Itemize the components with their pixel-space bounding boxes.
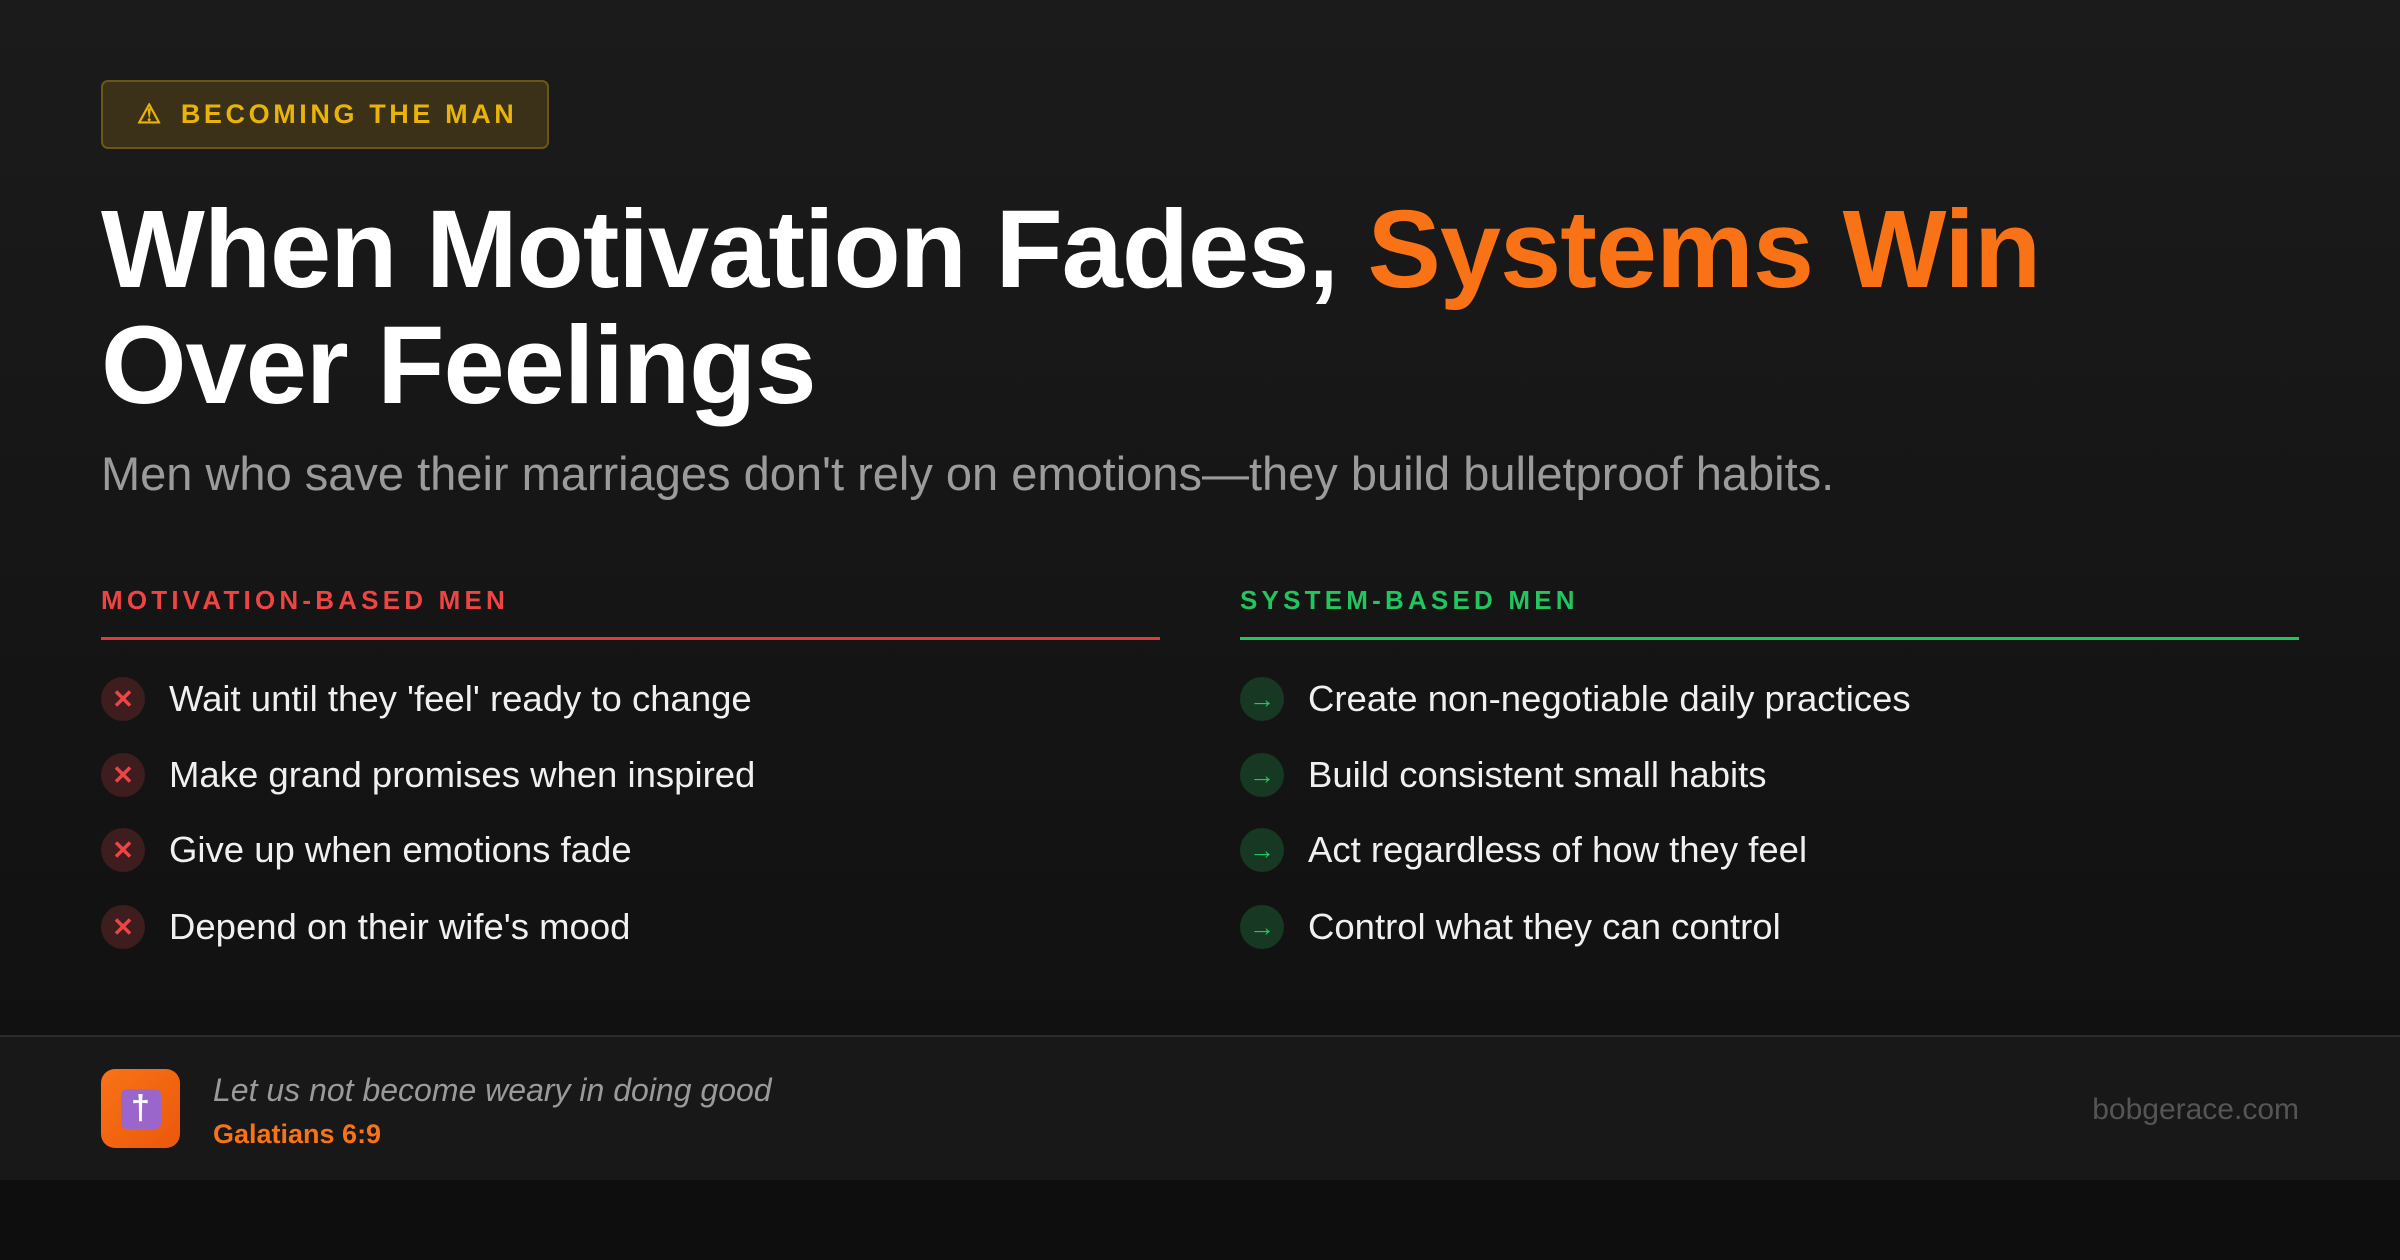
badge — [101, 80, 549, 149]
item 2: ✕ — [112, 760, 134, 790]
subtitle: Men who save their marriages don't rely on emotions—they build bulletproof habits. — [101, 447, 1834, 500]
item 1: Wait until they 'feel' ready to change — [169, 678, 752, 719]
item 1: Create non-negotiable daily practices — [1308, 678, 1911, 719]
heading: system-based — [1240, 585, 2299, 640]
item 3: Act regardless of how they feel — [1308, 829, 1807, 870]
panel: system-based men — [1240, 585, 2299, 949]
icon: cross: † — [131, 1089, 150, 1127]
quote: Let us not become weary in doing good — [213, 1072, 772, 1108]
item 4: Control what they can control — [1308, 906, 1781, 947]
item 3: Give up when emotions fade — [169, 829, 632, 870]
item 4: ✕ — [112, 912, 134, 942]
item 3: ✕ — [112, 834, 134, 864]
item 4: → — [1249, 912, 1275, 942]
heading: system-based: SYSTEM-BASED MEN — [1240, 585, 1579, 615]
title: When Motivation Fades, Systems Win — [101, 188, 2040, 311]
item 1: → — [1249, 684, 1275, 714]
reference: Galatians 6:9 — [213, 1119, 381, 1149]
item 4: Depend on their wife's mood — [169, 906, 630, 947]
item 2: → — [1249, 760, 1275, 790]
panel: motivation-based men — [101, 585, 1160, 949]
item 1: ✕ — [112, 684, 134, 714]
badge: BECOMING THE MAN — [181, 99, 517, 129]
badge: ⚠ — [137, 99, 165, 129]
heading: motivation-based: MOTIVATION-BASED MEN — [101, 585, 509, 615]
title: Over Feelings — [101, 304, 816, 427]
item 3: → — [1249, 834, 1275, 864]
icon: cross — [101, 1069, 180, 1148]
item 2: Make grand promises when inspired — [169, 754, 755, 795]
footer — [0, 1035, 2400, 1180]
website: bobgerace.com — [2092, 1093, 2299, 1126]
heading: motivation-based — [101, 585, 1160, 640]
title — [101, 188, 2040, 427]
item 2: Build consistent small habits — [1308, 754, 1766, 795]
